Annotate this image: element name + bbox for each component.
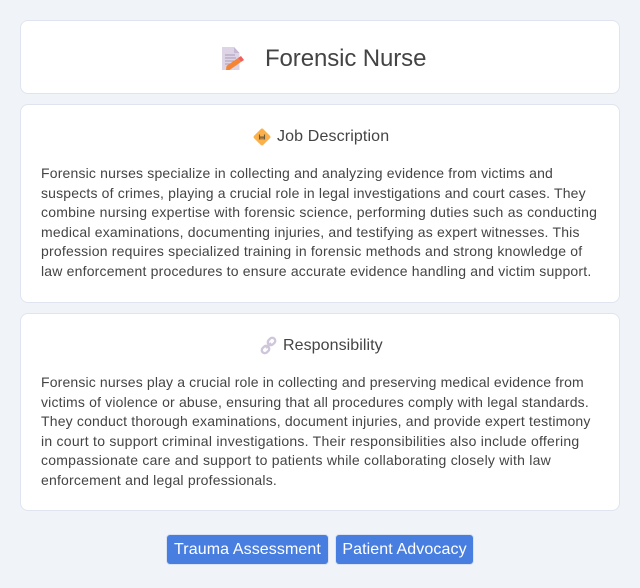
text block: job description: medical examinations, documenting injuries, and testifying as expert witnesses. This — [41, 224, 580, 240]
text block: responsibility: They conduct thorough examinations, document injuries, and provide expert testimony — [41, 413, 591, 429]
panel: job description — [20, 104, 620, 303]
panel: responsibility — [20, 313, 620, 511]
button: trauma assessment — [166, 534, 329, 565]
button: patient advocacy: Patient Advocacy — [342, 541, 467, 558]
text block: responsibility: enforcement and legal professionals. — [41, 472, 277, 488]
heading: job description: Job Description — [277, 128, 389, 145]
icon: document with pencil — [222, 47, 244, 70]
text block: job description: profession requires specialized training in forensic methods and strong knowledge of — [41, 243, 582, 259]
text block: responsibility — [41, 374, 591, 488]
text block: job description: law enforcement procedures to ensure accurate evidence handling and victim support. — [41, 263, 591, 279]
icon: chain link — [260, 336, 276, 354]
title: Forensic Nurse — [265, 45, 426, 72]
text block: responsibility: victims of violence or abuse, ensuring that all procedures comply with legal standards. — [41, 394, 589, 410]
text block: job description: combine nursing expertise with forensic science, performing duties such as conducting — [41, 204, 597, 220]
text block: responsibility: Forensic nurses play a crucial role in collecting and preserving medical evidence from — [41, 374, 584, 390]
text block: job description: Forensic nurses specialize in collecting and analyzing evidence from victims and — [41, 165, 553, 181]
heading: responsibility: Responsibility — [283, 337, 383, 354]
button: trauma assessment: Trauma Assessment — [174, 541, 321, 558]
button: patient advocacy — [335, 534, 474, 565]
text block: job description — [41, 165, 597, 279]
icon: diamond sign — [254, 128, 270, 146]
panel: title card — [20, 20, 620, 94]
text block: responsibility: compassionate care and support to patients while collaborating closely with law — [41, 452, 551, 468]
text block: responsibility: in court to support criminal investigations. Their responsibilities also include offering — [41, 433, 579, 449]
text block: job description: suspects of crimes, playing a crucial role in legal investigations and court cases. They — [41, 185, 586, 201]
